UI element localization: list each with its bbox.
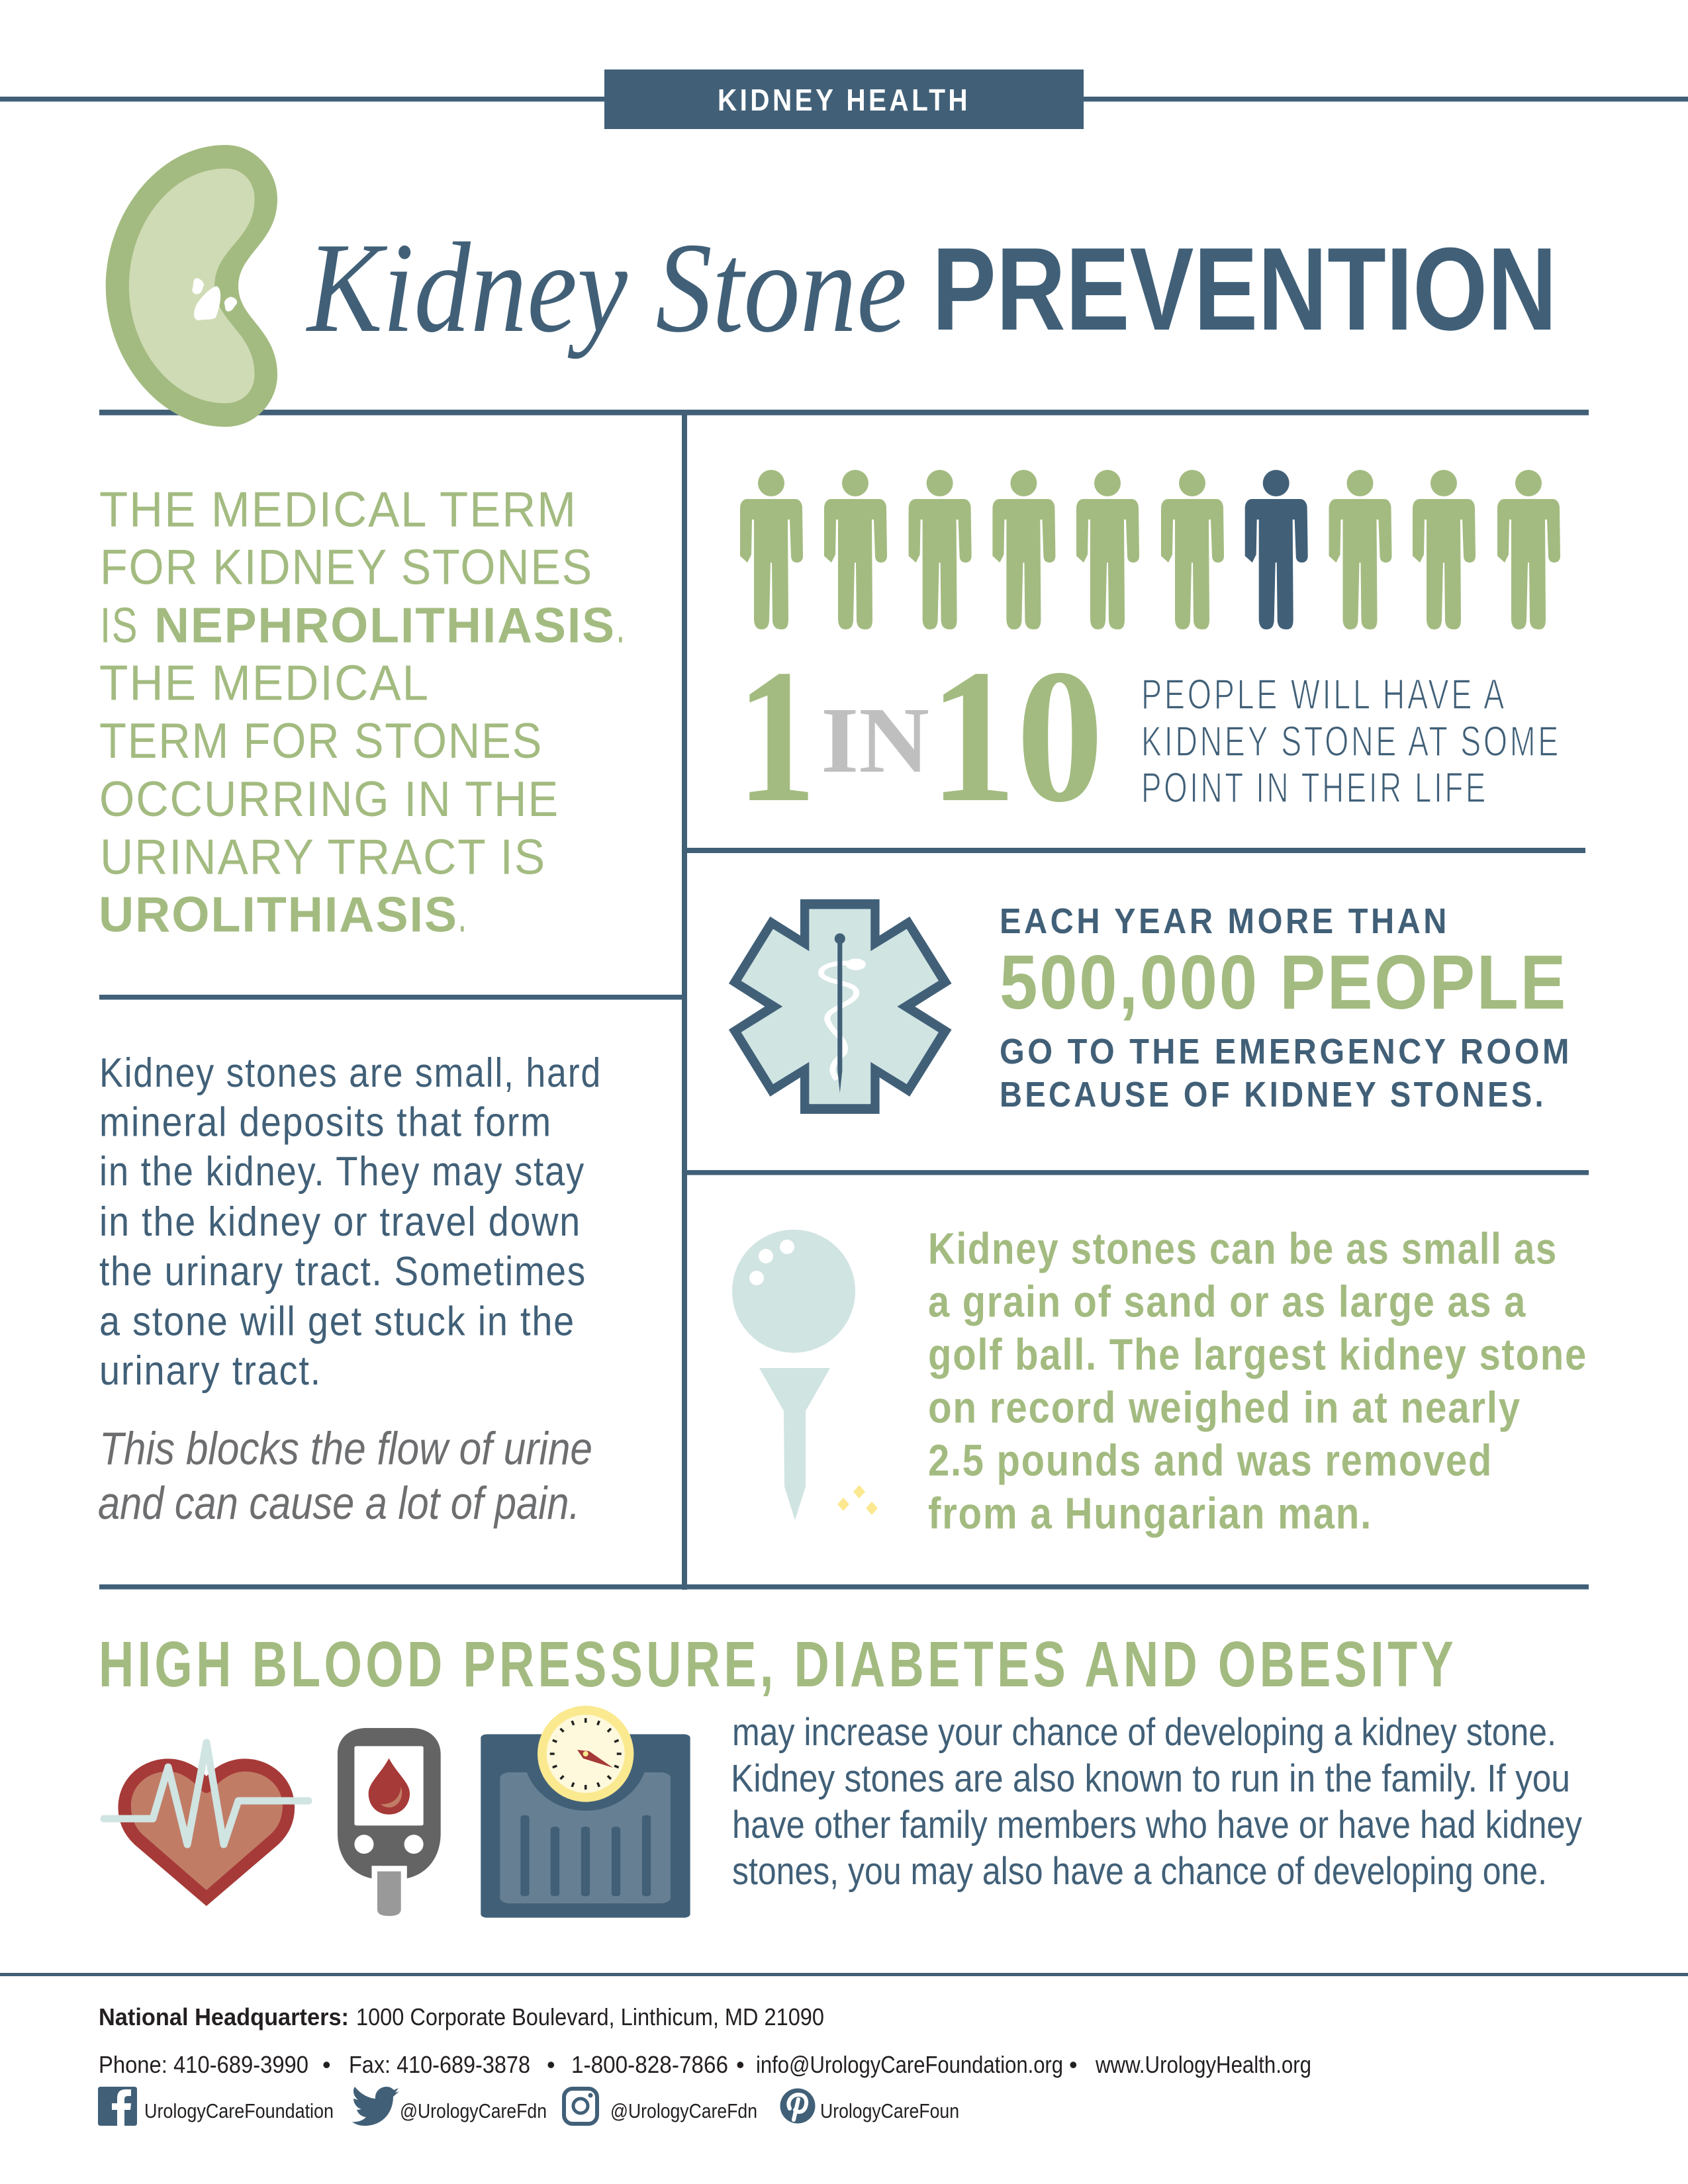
icon: star of life	[729, 899, 952, 1114]
text block: italic note: and can cause a lot of pain.	[98, 1477, 580, 1529]
text block: emergency room statistic	[1000, 901, 1572, 1115]
footer: contact line	[99, 2051, 1311, 2078]
text block: medical terms: UROLITHIASIS	[99, 887, 458, 942]
text block: description: the urinary tract. Sometimes	[99, 1249, 586, 1295]
text block: medical terms: THE MEDICAL TERM	[99, 482, 577, 537]
footer: address: National Headquarters:	[99, 2003, 349, 2030]
text block: description: urinary tract.	[99, 1348, 322, 1394]
statistic: 1 in 10	[737, 629, 1103, 842]
text block: stone size facts: a grain of sand or as large as a	[928, 1277, 1526, 1326]
footer: contact line: Fax: 410-689-3878	[349, 2051, 530, 2078]
person	[1161, 470, 1224, 629]
social: pinterest: UrologyCareFoun	[820, 2099, 959, 2122]
footer: address: 1000 Corporate Boulevard, Linthicum, MD 21090	[356, 2003, 824, 2030]
statistic: 1 in 10: 10	[929, 629, 1103, 842]
footer: contact line: •	[736, 2051, 745, 2078]
text block: stone size facts: on record weighed in at nearly	[928, 1383, 1521, 1432]
footer: contact line: info@UrologyCareFoundation.org	[756, 2051, 1063, 2078]
footer: contact line: •	[547, 2051, 555, 2078]
text block: stone size facts: golf ball. The largest kidney stone	[928, 1330, 1587, 1379]
text block: risk explanation: Kidney stones are also known to run in the family. If you	[731, 1757, 1570, 1800]
banner: kidney health	[604, 69, 1084, 129]
icon: heart with pulse	[104, 1743, 308, 1906]
banner: kidney health: KIDNEY HEALTH	[718, 83, 970, 117]
text block: emergency room statistic: 500,000 PEOPLE	[1000, 939, 1568, 1025]
text block: italic note: This blocks the flow of urine	[99, 1423, 592, 1475]
text block: stone size facts	[928, 1224, 1587, 1538]
person	[740, 470, 803, 629]
person	[1329, 470, 1391, 629]
text block: medical terms: TERM FOR STONES	[99, 713, 543, 768]
footer: contact line: 1-800-828-7866	[571, 2051, 728, 2078]
title: PREVENTION	[932, 223, 1557, 355]
title	[305, 216, 1557, 359]
person	[1497, 470, 1560, 629]
footer: contact line: •	[322, 2051, 331, 2078]
text block: medical terms: .	[616, 597, 626, 653]
text block: risk explanation: stones, you may also have a chance of developing one.	[732, 1850, 1547, 1893]
footer: contact line: Phone: 410-689-3990	[99, 2051, 308, 2078]
social: facebook	[98, 2087, 334, 2126]
icon: kidney	[106, 145, 277, 427]
icon: glucose meter	[338, 1728, 441, 1916]
text block: medical terms: IS	[100, 597, 138, 653]
text block: stone size facts: from a Hungarian man.	[928, 1489, 1372, 1538]
text block: description	[99, 1050, 602, 1394]
person highlighted	[1245, 470, 1308, 629]
icon: golf ball on tee	[732, 1230, 878, 1520]
text block: risk explanation: have other family members who have or have had kidney	[732, 1803, 1582, 1846]
text block: 1 in 10 description: POINT IN THEIR LIFE	[1141, 764, 1488, 811]
icon: weight scale	[481, 1706, 690, 1918]
text block: emergency room statistic: BECAUSE OF KIDNEY STONES.	[1000, 1075, 1546, 1115]
social: twitter: @UrologyCareFdn	[400, 2099, 547, 2122]
text block: medical terms: URINARY TRACT IS	[100, 829, 546, 884]
social: instagram: @UrologyCareFdn	[610, 2099, 757, 2122]
text block: medical terms: FOR KIDNEY STONES	[100, 539, 593, 595]
text block: description: in the kidney or travel down	[99, 1199, 581, 1245]
person	[992, 470, 1055, 629]
text block: stone size facts: Kidney stones can be as small as	[928, 1224, 1558, 1273]
person	[1413, 470, 1476, 629]
text block: description: Kidney stones are small, hard	[99, 1050, 602, 1096]
text block: 1 in 10 description	[1141, 670, 1561, 811]
text block: medical terms: NEPHROLITHIASIS	[154, 597, 616, 653]
text block: medical terms	[99, 482, 626, 942]
text block: emergency room statistic: EACH YEAR MORE THAN	[1000, 901, 1450, 941]
text block: risk explanation	[731, 1711, 1582, 1893]
text block: risk explanation: may increase your chance of developing a kidney stone.	[732, 1711, 1556, 1754]
text block: medical terms: THE MEDICAL	[99, 655, 430, 711]
text block: medical terms: OCCURRING IN THE	[99, 771, 559, 827]
text block: italic note	[98, 1423, 592, 1529]
person	[824, 470, 887, 629]
text block: emergency room statistic: GO TO THE EMERGENCY ROOM	[1000, 1032, 1572, 1071]
text block: description: mineral deposits that form	[99, 1100, 552, 1146]
person	[1076, 470, 1139, 629]
text block: stone size facts: 2.5 pounds and was removed	[928, 1436, 1493, 1485]
text block: medical terms: .	[458, 887, 467, 942]
footer: contact line: www.UrologyHealth.org	[1095, 2051, 1311, 2078]
title: Kidney Stone	[305, 216, 907, 359]
statistic: 1 in 10: IN	[821, 688, 929, 792]
footer: contact line: •	[1069, 2051, 1078, 2078]
statistic: 1 in 10: 1	[737, 629, 816, 842]
pictogram: ten people	[740, 470, 1560, 629]
person	[909, 470, 972, 629]
social: instagram	[564, 2089, 757, 2124]
text block: description: in the kidney. They may stay	[99, 1149, 585, 1195]
text block: description: a stone will get stuck in the	[99, 1299, 575, 1345]
social: pinterest	[780, 2089, 959, 2123]
footer: address	[99, 2003, 824, 2030]
text block: 1 in 10 description: PEOPLE WILL HAVE A	[1141, 670, 1507, 718]
social: facebook: UrologyCareFoundation	[144, 2099, 334, 2122]
social: twitter	[352, 2087, 547, 2126]
